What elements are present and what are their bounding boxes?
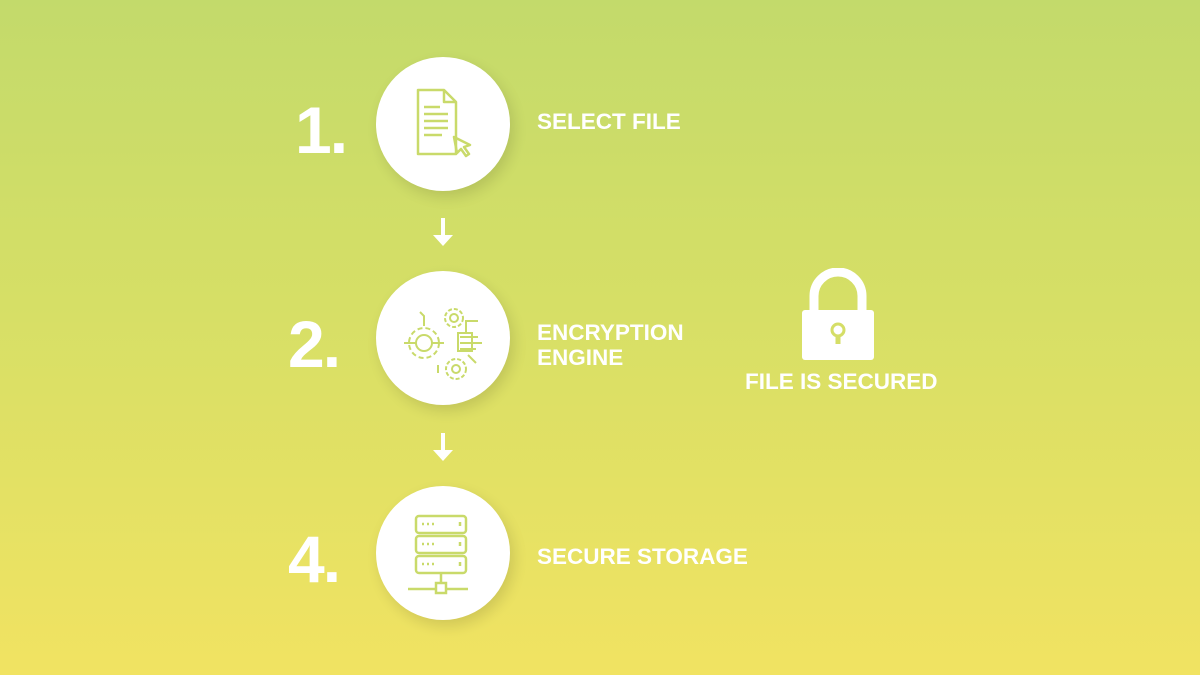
label: file is secured: FILE IS SECURED [745, 369, 938, 394]
step 2 circle: gears icon [376, 271, 510, 405]
step 4 circle: server icon [376, 486, 510, 620]
arrow 2 [433, 433, 453, 461]
step 1 label: SELECT FILE [537, 109, 681, 134]
step 2 number: 2. [288, 307, 339, 381]
step 2 label [537, 320, 684, 370]
step 2 label: ENGINE [537, 345, 623, 370]
step 4 label: SECURE STORAGE [537, 544, 748, 569]
icon: padlock [802, 268, 874, 360]
step 4 number: 4. [288, 522, 339, 596]
arrow 1 [433, 218, 453, 246]
step 1 number: 1. [295, 93, 346, 167]
step 2 label: ENCRYPTION [537, 320, 684, 345]
step 1 circle: file icon [376, 57, 510, 191]
